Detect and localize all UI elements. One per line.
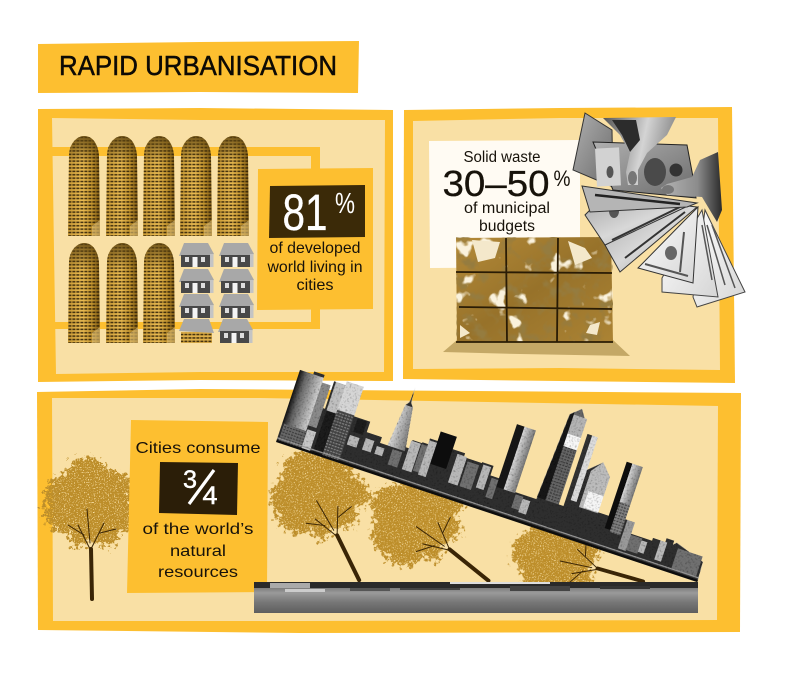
callout: solid waste: % (554, 166, 570, 191)
icon: upper hand (603, 117, 676, 185)
callout: 81 percent: % (335, 188, 355, 220)
callout: 81 percent: of developed (270, 240, 360, 257)
photo: tilted city skyline (276, 321, 738, 582)
callout: three quarters: 4 (202, 482, 218, 510)
callout: solid waste (429, 140, 580, 268)
callout: three quarters: natural (170, 543, 226, 560)
callout: 81 percent: cities (296, 277, 334, 294)
panel: urban population share (38, 108, 393, 382)
panel: solid waste budgets (403, 107, 745, 383)
photo: hands with fanned banknotes (573, 113, 745, 307)
callout: 81 percent: world living in (267, 259, 362, 276)
title banner (38, 41, 359, 93)
tree: leaning further (349, 452, 520, 617)
callout: three quarters: Cities consume (136, 440, 261, 457)
callout: three quarters: of the world’s (142, 521, 254, 538)
callout: three quarters: resources (158, 564, 238, 581)
tree: leaning slightly (256, 431, 404, 600)
callout: solid waste: Solid waste (464, 149, 540, 166)
title: RAPID URBANISATION (59, 50, 337, 81)
callout: solid waste: 30–50 (442, 163, 550, 204)
icon: right hand (661, 152, 722, 222)
callout: three quarters: 3 (183, 466, 197, 494)
panel: natural resources consumption (37, 321, 741, 633)
callout: 81 percent (257, 168, 373, 310)
callout: three quarters (127, 420, 268, 593)
tower and house pictogram grid (68, 136, 254, 343)
photo: waterfront (254, 582, 698, 613)
callout: solid waste: of municipal (464, 200, 550, 217)
tree: almost flattened (501, 497, 657, 625)
callout: 81 percent: 81 (282, 184, 328, 241)
photo: waste bales (443, 237, 630, 356)
tree: upright (44, 457, 141, 599)
callout: solid waste: budgets (479, 218, 535, 235)
